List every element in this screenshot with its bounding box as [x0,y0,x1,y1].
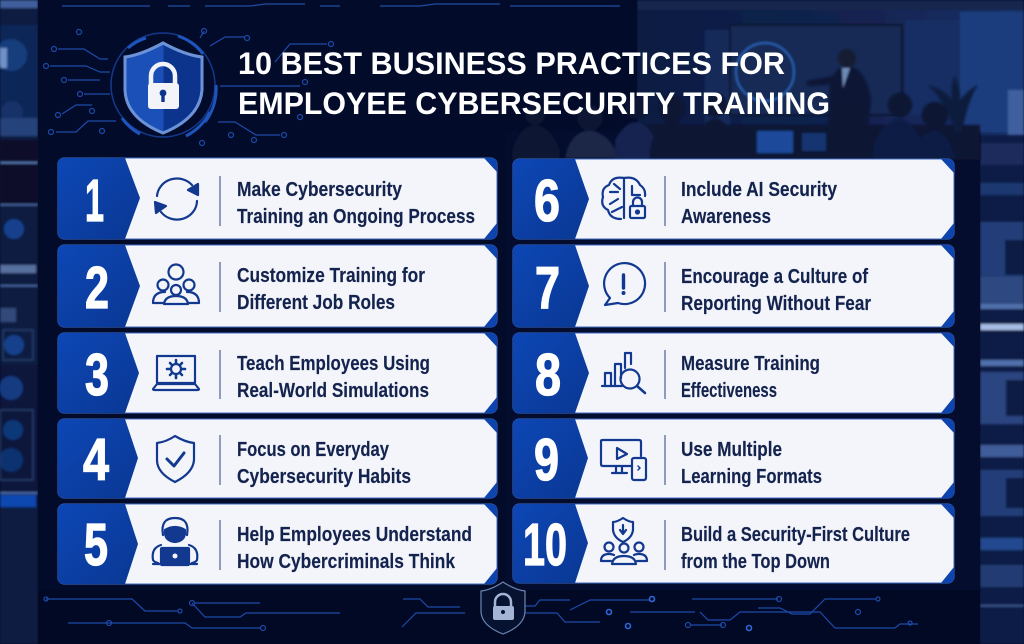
background: right server racks [980,130,1024,644]
top circuit strip [62,4,620,6]
card 7 [513,245,954,327]
card 8 [513,333,954,413]
card 8: Effectiveness [681,380,777,402]
card 3: Teach Employees Using [237,353,430,375]
background: training room photo [637,0,1024,135]
card 1: Training an Ongoing Process [237,206,475,228]
card 4: 4 [83,427,109,493]
shield emblem with circuits [44,28,334,146]
icon: bars with magnifier [602,353,645,393]
photo: presenter and audience [512,49,980,160]
card 9: Use Multiple [681,439,782,461]
card 6: 6 [534,168,560,234]
card 6: Awareness [681,206,771,228]
card 5: 5 [84,512,108,578]
card 10 [513,504,954,583]
title [238,45,830,121]
footer shield with lock [481,582,525,634]
card 7: Encourage a Culture of [681,266,868,288]
icon: hacker [153,518,197,565]
card 9: Learning Formats [681,466,822,488]
icon: shield over team [601,518,647,564]
card 8: Measure Training [681,353,820,375]
card 5: How Cybercriminals Think [237,551,456,573]
icon: shield check [157,436,194,482]
card 3: Real-World Simulations [237,380,429,402]
card 9: 9 [534,427,559,493]
card 5 [58,504,497,584]
card 7: 7 [535,255,560,321]
card 7: Reporting Without Fear [681,293,871,315]
title: EMPLOYEE CYBERSECURITY TRAINING [238,85,830,121]
card 4: Cybersecurity Habits [237,466,411,488]
card 6 [513,159,954,239]
card 6: Include AI Security [681,179,838,201]
card 2: Customize Training for [237,265,425,287]
card 3 [58,333,497,413]
card 2: Different Job Roles [237,292,395,314]
card 1: Make Cybersecurity [237,179,403,201]
card 3: 3 [85,342,109,408]
card 10: from the Top Down [681,551,830,573]
card 4 [58,419,497,498]
icon: alert speech bubble [604,263,645,305]
background: left server racks [0,0,38,644]
icon: refresh arrows [155,178,198,220]
icon: monitor and phone [601,440,646,480]
icon: team [153,264,199,304]
icon: brain with lock [602,178,645,219]
bottom circuit lines [44,596,918,630]
card 10: 10 [523,512,567,578]
card 1 [58,158,497,239]
card 8: 8 [535,342,561,408]
card 1: 1 [85,168,104,234]
card 5: Help Employees Understand [237,524,472,546]
card 9 [513,419,954,498]
card 2: 2 [85,255,109,321]
card 2 [58,245,497,327]
card 10: Build a Security-First Culture [681,524,910,546]
icon: laptop with gear [153,356,199,390]
title: 10 BEST BUSINESS PRACTICES FOR [238,45,785,81]
card 4: Focus on Everyday [237,439,390,461]
